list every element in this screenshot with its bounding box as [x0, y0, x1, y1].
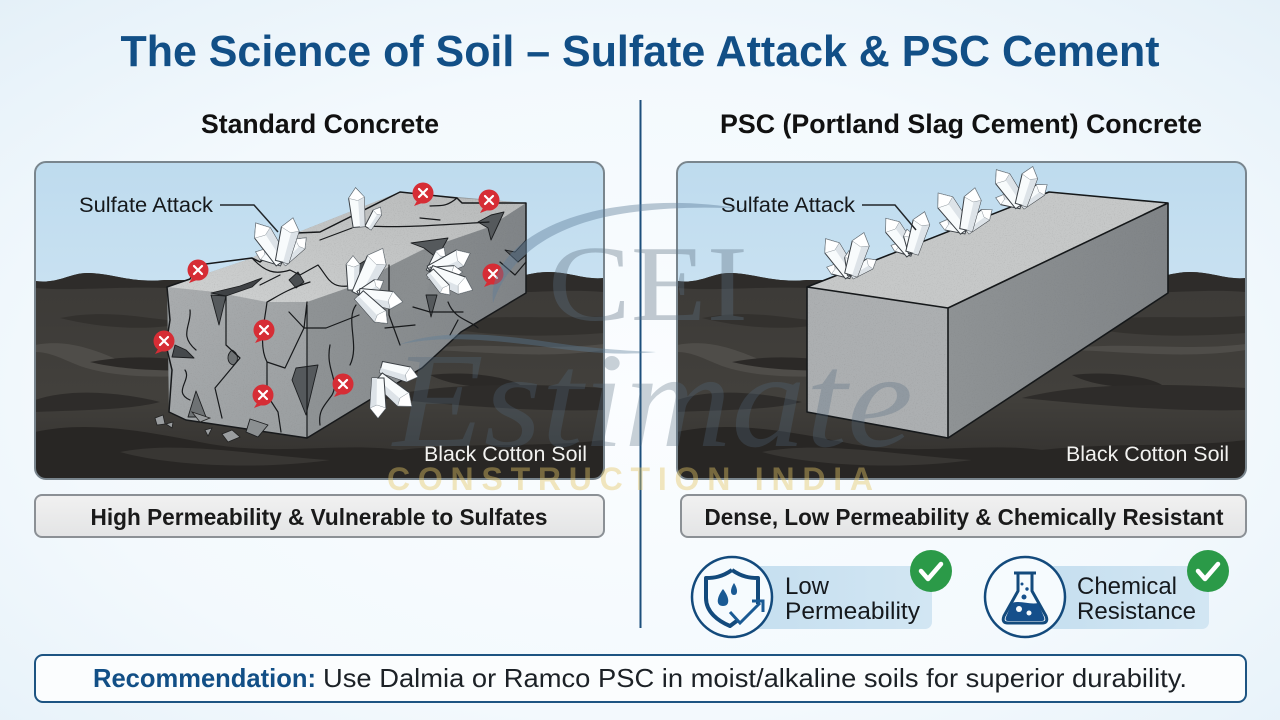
damaged concrete block — [155, 192, 526, 442]
caption: standard concrete — [35, 495, 604, 537]
centre divider — [640, 100, 642, 628]
badge: low permeability — [692, 550, 952, 637]
heading: standard concrete: Standard Concrete — [201, 109, 439, 139]
damage markers — [154, 182, 504, 408]
watermark: CEI Estimate Construction India: Estimate — [391, 326, 913, 476]
title: The Science of Soil – Sulfate Attack & PSC Cement — [120, 27, 1160, 76]
badge: chemical resistance: Resistance — [1077, 598, 1196, 625]
panel: PSC concrete illustration — [677, 162, 1246, 480]
recommendation bar — [35, 655, 1246, 702]
intact concrete block — [807, 192, 1168, 438]
dark cavities and fissures — [172, 212, 526, 437]
heading: PSC concrete: PSC (Portland Slag Cement) Concrete — [720, 109, 1202, 139]
watermark: CEI Estimate Construction India: CONSTRUCTION INDIA — [387, 461, 873, 497]
sulfate crystals on intact block — [819, 164, 1051, 280]
caption: standard concrete: High Permeability & Vulnerable to Sulfates — [90, 504, 548, 530]
icon: green check — [910, 550, 952, 592]
label: sulfate attack: Sulfate Attack — [721, 194, 856, 217]
label: black cotton soil: Black Cotton Soil — [424, 443, 587, 466]
badge: chemical resistance — [985, 550, 1229, 637]
sulfate crystals on damaged block — [248, 187, 476, 418]
label: black cotton soil: Black Cotton Soil — [1066, 443, 1229, 466]
icon: shield with water drops — [692, 557, 772, 637]
panel: standard concrete illustration — [35, 162, 604, 480]
watermark: CEI Estimate Construction India — [387, 203, 913, 497]
watermark: CEI Estimate Construction India: CEI — [548, 225, 748, 344]
icon: flask — [985, 557, 1065, 637]
recommendation bar: Recommendation: — [93, 663, 316, 693]
badge: low permeability: Permeability — [785, 598, 920, 625]
badge: chemical resistance: Chemical — [1077, 573, 1177, 600]
recommendation bar: Use Dalmia or Ramco PSC in moist/alkaline soils for superior durability. — [323, 663, 1187, 693]
label: sulfate attack: Sulfate Attack — [79, 194, 214, 217]
caption: PSC concrete — [681, 495, 1246, 537]
caption: PSC concrete: Dense, Low Permeability & Chemically Resistant — [704, 504, 1224, 530]
label: sulfate attack — [721, 194, 916, 230]
badge: low permeability: Low — [785, 573, 830, 600]
label: sulfate attack — [79, 194, 278, 232]
icon: green check — [1187, 550, 1229, 592]
